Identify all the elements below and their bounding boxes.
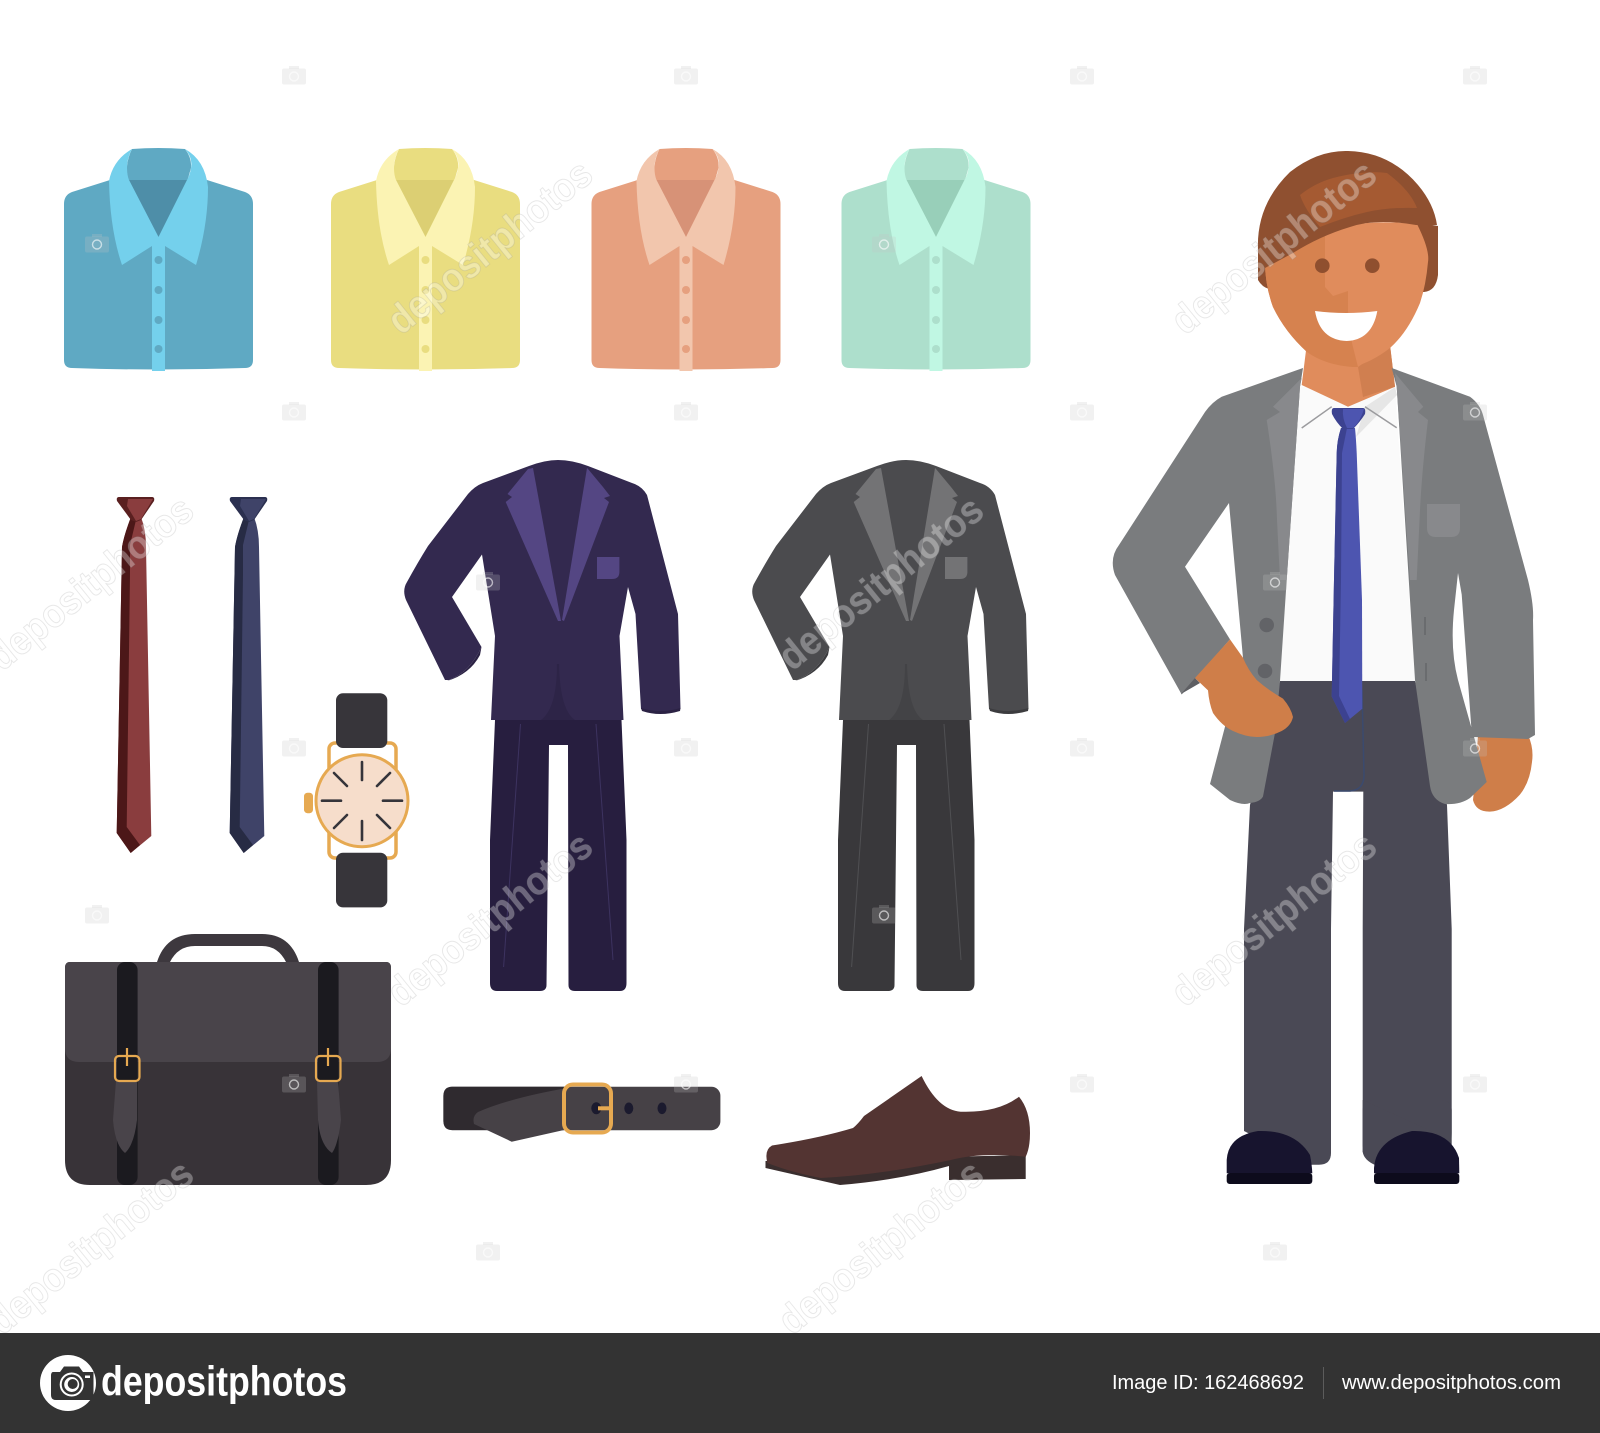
navy trousers xyxy=(490,720,626,991)
man: face xyxy=(1265,222,1428,367)
man: jacket buttons xyxy=(1258,618,1274,678)
stock watermark overlay: depositphotos xyxy=(1163,823,1385,1015)
suit: charcoal xyxy=(752,460,1028,991)
shirt: yellow xyxy=(331,148,520,371)
shirt: mint xyxy=(842,148,1030,371)
man: neck xyxy=(1302,345,1395,407)
navy jacket xyxy=(404,460,680,720)
charcoal trousers xyxy=(838,720,974,991)
stock watermark overlay: depositphotos xyxy=(1163,151,1385,343)
man: smile xyxy=(1315,311,1377,341)
man: hair xyxy=(1258,151,1437,268)
man: necktie xyxy=(1332,408,1365,723)
man: right shoe xyxy=(1374,1131,1459,1184)
stock watermark overlay: depositphotos xyxy=(379,151,601,343)
man: jacket left side xyxy=(1113,368,1303,804)
wristwatch xyxy=(304,693,408,907)
man: left shoe xyxy=(1227,1131,1312,1184)
image id: Image ID: 162468692 xyxy=(1112,1372,1304,1394)
man: eyes xyxy=(1315,258,1380,273)
stock watermark overlay: depositphotos xyxy=(770,487,992,679)
leather shoe xyxy=(766,1076,1030,1185)
man: right hand xyxy=(1473,735,1532,812)
belt xyxy=(443,1084,720,1142)
briefcase xyxy=(65,934,391,1185)
man: left hand xyxy=(1195,639,1293,737)
suit: navy xyxy=(404,460,680,991)
shirt: blue xyxy=(64,148,253,371)
necktie: navy xyxy=(230,497,267,853)
logo wordmark: depositphotos xyxy=(101,1358,347,1404)
footer band xyxy=(0,1333,1600,1433)
necktie: burgundy xyxy=(117,497,154,853)
businessman figure xyxy=(1113,151,1535,1184)
man: trousers xyxy=(1244,681,1452,1165)
stock watermark overlay: depositphotos xyxy=(379,823,601,1015)
man: jacket pocket xyxy=(1427,504,1460,537)
stock watermark overlay: depositphotos xyxy=(770,1151,992,1343)
man: lapels xyxy=(1267,378,1302,580)
icon: camera logo xyxy=(40,1355,96,1411)
charcoal jacket xyxy=(752,460,1028,720)
man: back hair xyxy=(1258,222,1438,292)
man: jacket right side xyxy=(1392,368,1535,804)
man: white shirt xyxy=(1280,387,1415,681)
shirt: orange xyxy=(592,148,780,371)
site url: www.depositphotos.com xyxy=(1341,1372,1561,1394)
